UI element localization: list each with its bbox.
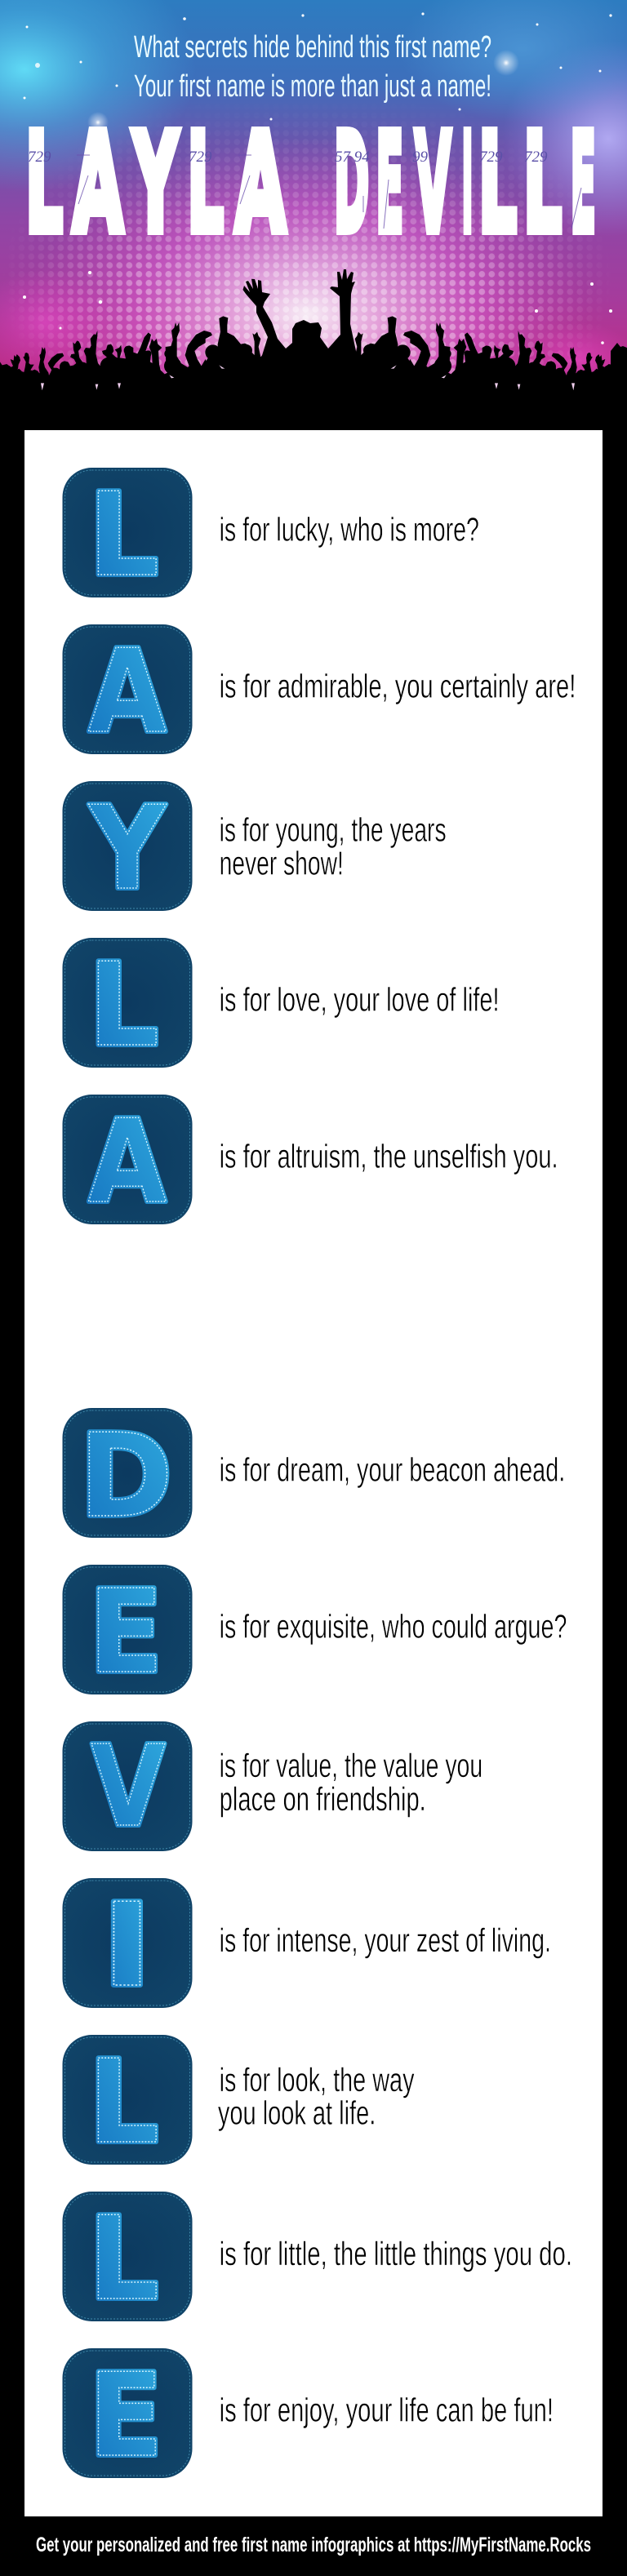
title: LAYLA DEVILLE: L: [25, 105, 63, 263]
letter tile I: I: [101, 1879, 153, 2013]
row: A is for admirable: [62, 624, 576, 759]
row: Y is for young: never show!: [220, 844, 344, 882]
letter tile L: L: [88, 2192, 159, 2326]
letter tile I: I: [101, 1879, 153, 2013]
letter tile E: [62, 2348, 193, 2483]
letter tile Y: Y: [88, 782, 167, 916]
title: LAYLA DEVILLE: 729: [28, 149, 51, 166]
letter tile A: A: [88, 1095, 167, 1229]
row: L is for little: [62, 2192, 572, 2326]
letter tile L: L: [88, 469, 159, 602]
row: L is for love: [62, 938, 500, 1073]
title: LAYLA DEVILLE: A: [73, 105, 123, 263]
letter tile D: D: [79, 1410, 173, 1543]
title: LAYLA DEVILLE: L: [478, 105, 517, 263]
header: concert background: [0, 0, 627, 375]
letter tile A: [62, 1095, 193, 1229]
row: L is for lucky: is for lucky, who is more?: [220, 511, 479, 549]
row: E is for enjoy: [62, 2348, 554, 2483]
row: L is for look: is for look, the way: [220, 2061, 415, 2099]
letter tile A: [62, 624, 193, 759]
title: LAYLA DEVILLE: L: [523, 105, 562, 263]
letter tile V: [62, 1721, 193, 1852]
row: E is for exquisite: [62, 1565, 567, 1699]
title: LAYLA DEVILLE: 729: [189, 149, 212, 166]
letter tile E: E: [88, 2349, 163, 2483]
letter tile D: D: [79, 1410, 173, 1543]
letter tile L: [62, 468, 193, 602]
row: I is for intense: [62, 1878, 551, 2013]
title: LAYLA DEVILLE: I: [462, 105, 473, 263]
letter tile L: L: [88, 2192, 159, 2326]
letter tile V: V: [91, 1722, 165, 1852]
letter tile A: A: [88, 1095, 167, 1229]
title: LAYLA DEVILLE: [25, 105, 596, 263]
letter tile L: L: [88, 939, 159, 1073]
title: LAYLA DEVILLE: D: [334, 105, 369, 263]
title: LAYLA DEVILLE: Y: [132, 105, 179, 263]
white content panel: [24, 430, 603, 2516]
letter tile E: E: [88, 2349, 163, 2483]
letter tile A: A: [88, 625, 167, 759]
row: Y is for young: [62, 781, 447, 916]
row: L is for look: [62, 2035, 415, 2170]
title: LAYLA DEVILLE: 729: [524, 149, 548, 166]
letter tile Y: [62, 781, 193, 916]
row: A is for altruism: [62, 1095, 558, 1229]
title: LAYLA DEVILLE: L: [188, 105, 224, 263]
letter tile L: L: [88, 469, 159, 602]
letter tile L: L: [88, 939, 159, 1073]
letter tile L: [62, 938, 193, 1073]
row: L is for look: you look at life.: [218, 2094, 376, 2131]
row: D is for dream: [62, 1408, 565, 1543]
letter tile E: [62, 1565, 193, 1699]
title: LAYLA DEVILLE: A: [235, 105, 286, 263]
letter tile L: L: [88, 2036, 159, 2170]
title: LAYLA DEVILLE: 729: [479, 149, 503, 166]
letter tile L: [62, 2035, 193, 2170]
letter tile E: E: [88, 1566, 163, 1699]
letter tile L: L: [88, 2036, 159, 2170]
title: LAYLA DEVILLE: V: [415, 105, 451, 263]
letter tile V: V: [91, 1722, 165, 1852]
title: LAYLA DEVILLE: 57 94: [335, 149, 370, 166]
row: V is for value: [62, 1721, 482, 1852]
row: Y is for young: is for young, the years: [220, 811, 447, 849]
letter tile I: [62, 1878, 193, 2013]
row: L is for lucky: [62, 468, 479, 602]
title: LAYLA DEVILLE: E: [376, 105, 403, 263]
crowd silhouette: [0, 269, 627, 430]
row: V is for value: place on friendship.: [220, 1780, 426, 1818]
row: V is for value: is for value, the value you: [220, 1747, 482, 1784]
row: L is for love: is for love, your love of life!: [220, 981, 500, 1019]
title: LAYLA DEVILLE: 99: [412, 149, 428, 166]
letter tile L: [62, 2192, 193, 2326]
letter tile E: E: [88, 1566, 163, 1699]
letter tile A: A: [88, 625, 167, 759]
letter tile Y: Y: [88, 782, 167, 916]
